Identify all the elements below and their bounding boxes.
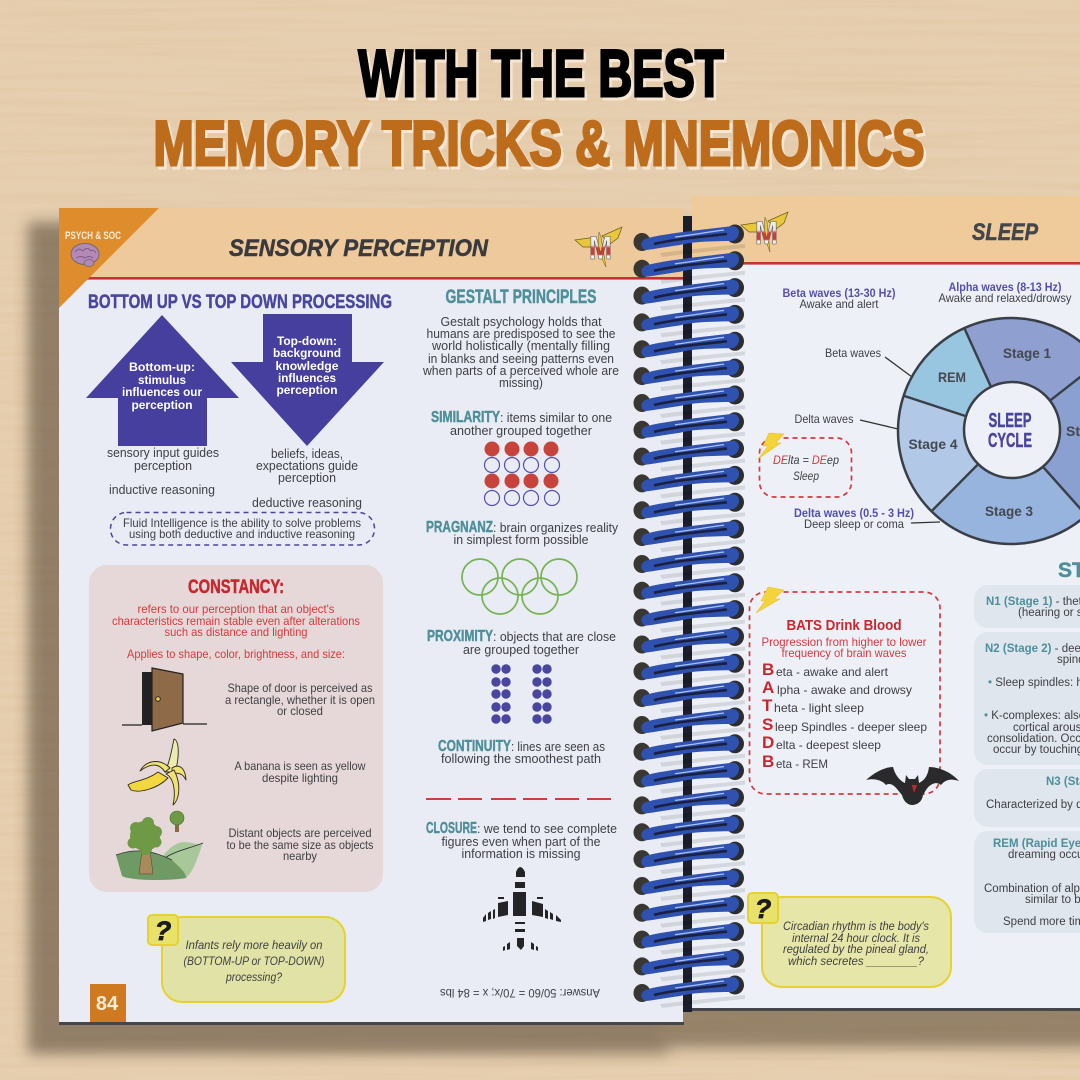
tree text: Distant objects are perceived bbox=[228, 826, 372, 840]
gestalt intro bbox=[422, 315, 619, 390]
corner tab bbox=[59, 208, 159, 308]
page shadow bbox=[59, 1022, 684, 1025]
question box: infants: (BOTTOM-UP or TOP-DOWN) bbox=[184, 954, 324, 968]
question box: circadian: which secretes ________? bbox=[788, 954, 924, 968]
banana text bbox=[234, 759, 366, 785]
pragnanz text: : brain organizes reality bbox=[493, 521, 619, 535]
panel: N2 bbox=[974, 632, 1080, 765]
panel: REM bbox=[974, 831, 1080, 933]
arrow: bottom-up bbox=[86, 315, 239, 446]
book shadow bbox=[28, 222, 1080, 1054]
tree text bbox=[226, 826, 374, 863]
delta waves callout bbox=[794, 412, 898, 429]
delta mnemonic box: Sleep bbox=[793, 469, 819, 483]
logo: winged M bbox=[741, 212, 788, 252]
callout: fluid intelligence bbox=[110, 512, 374, 545]
BATS mnemonic box: eta - awake and alert bbox=[776, 665, 889, 679]
icon: airplane closure figure bbox=[483, 867, 561, 951]
BATS mnemonic box: heta - light sleep bbox=[774, 701, 864, 715]
beta label bbox=[782, 286, 896, 311]
BATS mnemonic box: Progression from higher to lower bbox=[762, 635, 926, 649]
definition: characteristics remain stable even after alterations bbox=[112, 614, 360, 628]
arrow: bottom-up: influences our bbox=[122, 385, 202, 399]
proximity dots bbox=[491, 664, 552, 724]
sleep cycle wheel bbox=[896, 316, 1080, 546]
header band bbox=[692, 196, 1080, 263]
icon: lightning bbox=[756, 587, 784, 613]
gestalt intro: in blanks and seeing patterns even bbox=[428, 352, 614, 366]
BATS mnemonic box: elta - deepest sleep bbox=[776, 738, 881, 752]
question box: circadian bbox=[748, 893, 951, 987]
beta label: Beta waves (13-30 Hz) bbox=[782, 286, 896, 300]
similarity text: : items similar to one bbox=[500, 411, 612, 425]
right page: sleep bbox=[692, 196, 1080, 1011]
heading: gestalt principles: GESTALT PRINCIPLES bbox=[446, 287, 596, 308]
definition bbox=[112, 602, 360, 661]
icon: trees and hills bbox=[116, 811, 203, 880]
question box: infants: processing? bbox=[225, 970, 282, 984]
beta label: Awake and alert bbox=[800, 297, 879, 311]
icon: banana bbox=[128, 739, 186, 805]
callout: fluid intelligence: Fluid Intelligence is the ability to solve problems bbox=[123, 516, 361, 530]
question box: circadian: Circadian rhythm is the body's bbox=[783, 919, 929, 933]
closure text bbox=[426, 820, 617, 861]
beta waves callout bbox=[825, 346, 912, 377]
arrow: bottom-up: stimulus bbox=[138, 373, 186, 387]
continuity text: CONTINUITY bbox=[438, 738, 512, 755]
panel: N3 bbox=[974, 769, 1080, 827]
icon: question mark bbox=[148, 915, 178, 946]
icon: bat bbox=[866, 767, 959, 805]
continuity dashes bbox=[426, 798, 611, 800]
continuity text bbox=[438, 738, 605, 766]
top-down notes: deductive reasoning bbox=[252, 496, 362, 510]
page sheet bbox=[59, 208, 683, 1022]
banana text: despite lighting bbox=[262, 771, 338, 785]
BATS mnemonic box: leep Spindles - deeper sleep bbox=[775, 720, 927, 734]
alpha label: Alpha waves (8-13 Hz) bbox=[948, 280, 1062, 294]
banana text: A banana is seen as yellow bbox=[234, 759, 366, 773]
sleep cycle wheel: CYCLE bbox=[988, 430, 1032, 452]
delta mnemonic box bbox=[758, 433, 852, 497]
icon: brain bbox=[71, 244, 99, 266]
icon: door bbox=[122, 668, 207, 731]
page lower edge bbox=[692, 1008, 1080, 1011]
continuity text: : lines are seen as bbox=[511, 740, 605, 754]
bottom-up notes: inductive reasoning bbox=[109, 483, 215, 497]
proximity text bbox=[427, 628, 616, 657]
closure text: figures even when part of the bbox=[442, 835, 600, 849]
BATS mnemonic box bbox=[750, 587, 940, 794]
red rule bbox=[59, 277, 683, 280]
icon: question mark: ? bbox=[155, 916, 171, 946]
heading: sensory perception: SENSORY PERCEPTION bbox=[229, 235, 489, 262]
gestalt intro: when parts of a perceived whole are bbox=[422, 364, 619, 378]
olympic rings bbox=[462, 559, 577, 614]
panel: N1 bbox=[974, 585, 1080, 628]
question box: infants bbox=[148, 915, 345, 1002]
door text: Shape of door is perceived as bbox=[228, 681, 372, 695]
delta waves note bbox=[794, 506, 940, 531]
pragnanz text bbox=[426, 519, 619, 547]
wedge: stage 3 bbox=[934, 466, 1080, 543]
corner tab label: PSYCH & SOC bbox=[65, 230, 121, 242]
definition: refers to our perception that an object's bbox=[138, 602, 334, 616]
similarity text bbox=[431, 409, 612, 438]
panel: constancy bbox=[89, 565, 383, 892]
continuity text: following the smoothest path bbox=[441, 752, 601, 766]
spine bbox=[683, 216, 692, 1012]
top-down notes: beliefs, ideas, bbox=[271, 447, 343, 461]
BATS mnemonic box: D bbox=[762, 733, 774, 752]
closure text: : we tend to see complete bbox=[477, 822, 617, 836]
logo: winged M: M bbox=[755, 215, 778, 251]
top-down notes: perception bbox=[278, 471, 336, 485]
sleep cycle wheel: SLEEP bbox=[988, 410, 1032, 432]
sleep cycle wheel: REM bbox=[938, 369, 966, 385]
top-down notes bbox=[252, 447, 362, 510]
arrow: top-down: perception bbox=[276, 383, 338, 397]
gestalt intro: world holistically (mentally filling bbox=[431, 339, 610, 353]
wedge: stage 1 bbox=[957, 312, 1080, 431]
door text bbox=[225, 681, 375, 718]
sleep cycle wheel: Stage 4 bbox=[908, 436, 958, 452]
arrow: bottom-up: perception bbox=[132, 398, 192, 412]
door text: a rectangle, whether it is open bbox=[225, 693, 375, 707]
callout: fluid intelligence: using both deductive and inductive reasoning bbox=[129, 527, 355, 541]
logo: winged M: M bbox=[589, 230, 612, 266]
arrow: top-down: background bbox=[273, 346, 341, 360]
alpha label bbox=[938, 280, 1072, 305]
pragnanz text: in simplest form possible bbox=[454, 533, 588, 547]
closure text: CLOSURE bbox=[426, 820, 477, 837]
question box: circadian: internal 24 hour clock. It is bbox=[792, 931, 920, 945]
gestalt intro: missing) bbox=[499, 376, 543, 390]
sleep cycle wheel: Stage 3 bbox=[985, 503, 1033, 519]
question box: circadian: regulated by the pineal gland, bbox=[783, 942, 929, 956]
tree text: nearby bbox=[283, 849, 317, 863]
gestalt intro: Gestalt psychology holds that bbox=[440, 315, 602, 329]
heading: constancy: CONSTANCY: bbox=[188, 577, 284, 598]
page sheet bbox=[692, 196, 1080, 1011]
proximity text: are grouped together bbox=[463, 643, 579, 657]
pragnanz text: PRAGNANZ bbox=[426, 519, 493, 536]
red rule bbox=[692, 262, 1080, 265]
spiral binding bbox=[634, 224, 745, 1008]
upside-down answer: Answer: 50/60 = 70/x; x = 84 lbs bbox=[440, 986, 600, 1000]
bottom-up notes bbox=[107, 446, 219, 497]
logo: winged M bbox=[575, 227, 622, 267]
sleep cycle wheel: Stage 1 bbox=[1003, 345, 1051, 361]
left page: sensory perception bbox=[59, 208, 684, 1025]
wedge: REM bbox=[905, 330, 990, 414]
top-down notes: expectations guide bbox=[256, 459, 358, 473]
icon: question mark bbox=[748, 893, 778, 924]
question box: infants: Infants rely more heavily on bbox=[186, 938, 323, 952]
BATS mnemonic box: T bbox=[762, 696, 773, 715]
bottom-up notes: sensory input guides bbox=[107, 446, 219, 460]
definition: Applies to shape, color, brightness, and size: bbox=[127, 647, 345, 661]
BATS mnemonic box: B bbox=[762, 660, 774, 679]
door text: or closed bbox=[277, 704, 323, 718]
heading: sleep: SLEEP bbox=[972, 219, 1039, 246]
heading: bottom up vs top down: BOTTOM UP VS TOP DOWN PROCESSING bbox=[88, 292, 392, 313]
title bbox=[154, 36, 924, 179]
tree text: to be the same size as objects bbox=[226, 838, 374, 852]
proximity text: PROXIMITY bbox=[427, 628, 494, 645]
definition: such as distance and lighting bbox=[164, 625, 308, 639]
page number bbox=[90, 984, 126, 1022]
arrow: top-down: influences bbox=[278, 371, 336, 385]
header band bbox=[59, 208, 683, 277]
BATS mnemonic box: frequency of brain waves bbox=[782, 646, 906, 660]
page number: 84 bbox=[96, 993, 119, 1015]
BATS mnemonic box: eta - REM bbox=[776, 757, 828, 771]
BATS mnemonic box: BATS Drink Blood bbox=[786, 617, 902, 634]
alpha label: Awake and relaxed/drowsy bbox=[938, 291, 1072, 305]
arrow: bottom-up: Bottom-up: bbox=[129, 360, 195, 374]
similarity dots bbox=[484, 442, 560, 506]
title line 1: WITH THE BEST bbox=[358, 36, 724, 110]
hub bbox=[964, 382, 1060, 478]
beta waves callout: Beta waves bbox=[825, 346, 881, 360]
similarity text: another grouped together bbox=[450, 424, 592, 438]
arrow: top-down bbox=[231, 314, 384, 446]
proximity text: : objects that are close bbox=[493, 630, 616, 644]
arrow: top-down: knowledge bbox=[276, 359, 339, 373]
BATS mnemonic box: A bbox=[762, 678, 774, 697]
delta waves note: Deep sleep or coma bbox=[804, 517, 904, 531]
arrow: top-down: Top-down: bbox=[277, 334, 337, 348]
bottom-up notes: perception bbox=[134, 459, 192, 473]
delta waves callout: Delta waves bbox=[794, 412, 854, 426]
icon: question mark: ? bbox=[755, 894, 771, 924]
delta mnemonic box: DElta = DEep bbox=[773, 453, 839, 467]
delta waves note: Delta waves (0.5 - 3 Hz) bbox=[794, 506, 914, 520]
similarity text: SIMILARITY bbox=[431, 409, 501, 426]
BATS mnemonic box: lpha - awake and drowsy bbox=[777, 683, 912, 697]
BATS mnemonic box: S bbox=[762, 715, 773, 734]
icon: lightning bbox=[758, 433, 784, 459]
gestalt intro: humans are predisposed to see the bbox=[426, 327, 616, 341]
wedge: stage 4 bbox=[899, 397, 976, 510]
BATS mnemonic box: B bbox=[762, 752, 774, 771]
closure text: information is missing bbox=[462, 847, 580, 861]
